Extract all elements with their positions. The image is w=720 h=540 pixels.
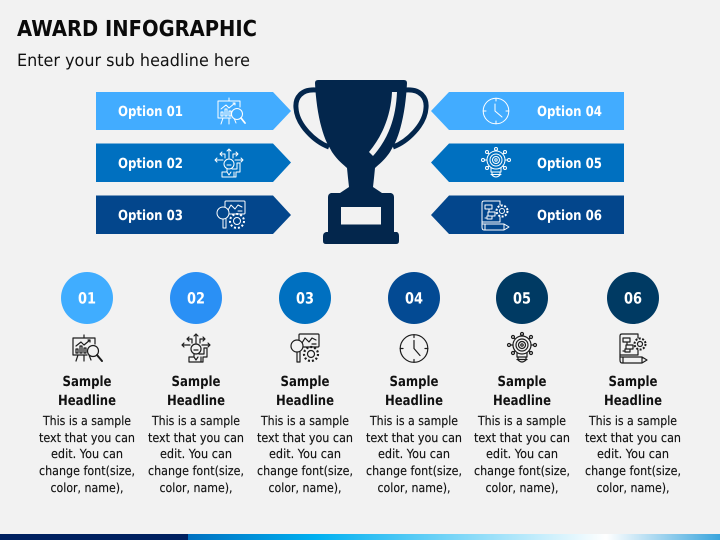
title: AWARD INFOGRAPHIC — [17, 17, 257, 42]
number badge 05: 05 — [513, 290, 531, 308]
panel: option 02: Option 02 — [118, 156, 183, 172]
number badge 04: 04 — [405, 290, 423, 308]
text: sample headline 04: Headline — [385, 393, 443, 409]
text: sample headline 06: color, name), — [596, 480, 670, 495]
panel: option 06 — [431, 196, 624, 234]
panel: option 06: Option 06 — [537, 208, 602, 224]
text: sample headline 01: text that you can — [39, 430, 135, 445]
number badge 06: 06 — [624, 290, 642, 308]
text: sample headline 02: color, name), — [160, 480, 232, 495]
number badge 02: 02 — [187, 290, 205, 308]
text: sample headline 03: color, name), — [268, 480, 342, 495]
text: sample headline 06: edit. You can — [597, 446, 669, 461]
subtitle: Enter your sub headline here — [17, 51, 250, 71]
text: sample headline 01 — [39, 374, 135, 495]
column 03 — [257, 272, 353, 495]
trophy highlight — [369, 92, 397, 156]
text: sample headline 01: color, name), — [50, 480, 124, 495]
text: sample headline 03: This is a sample — [260, 413, 349, 428]
text: sample headline 05: text that you can — [474, 430, 570, 445]
icon: light bulb target — [482, 148, 510, 177]
text: sample headline 01: Headline — [58, 393, 116, 409]
number badge 01 — [61, 272, 113, 324]
text: sample headline 04 — [366, 374, 462, 495]
panel: option 05 — [431, 144, 624, 182]
panel: option 04: Option 04 — [537, 104, 602, 120]
panel: option 01: Option 01 — [118, 104, 183, 120]
text: sample headline 04: change font(size, — [366, 463, 462, 478]
icon: blueprint gear pencil — [620, 334, 647, 363]
icon: presentation analytics — [218, 98, 245, 124]
panel: option 03 — [96, 196, 291, 234]
text: sample headline 06: Sample — [608, 374, 658, 390]
text: sample headline 05: Headline — [493, 393, 551, 409]
number badge 04 — [388, 272, 440, 324]
text: sample headline 05: change font(size, — [474, 463, 570, 478]
text: sample headline 04: text that you can — [366, 430, 462, 445]
number badge 02 — [170, 272, 222, 324]
text: sample headline 03: text that you can — [257, 430, 353, 445]
column 02 — [148, 272, 244, 495]
column 01 — [39, 272, 135, 495]
text: sample headline 05: color, name), — [486, 480, 558, 495]
text: sample headline 05: This is a sample — [477, 413, 566, 428]
panel: option 04 — [431, 92, 624, 130]
icon: magnifier chart gear — [217, 201, 245, 228]
text: sample headline 05: Sample — [498, 374, 546, 390]
text: sample headline 05 — [474, 374, 570, 495]
panel: option 05: Option 05 — [537, 156, 602, 172]
text: sample headline 02: change font(size, — [148, 463, 244, 478]
number badge 01: 01 — [78, 290, 96, 308]
text: sample headline 03: Sample — [280, 374, 330, 390]
icon: person with arrows — [215, 149, 243, 177]
number badge 05 — [496, 272, 548, 324]
text: sample headline 03 — [257, 374, 353, 495]
trophy plate — [341, 207, 381, 224]
text: sample headline 05: edit. You can — [486, 446, 558, 461]
text: sample headline 03: Headline — [276, 393, 334, 409]
number badge 06 — [607, 272, 659, 324]
icon: person with arrows — [182, 334, 210, 362]
icon: clock — [400, 335, 428, 362]
text: sample headline 04: Sample — [390, 374, 438, 390]
text: sample headline 02: Sample — [172, 374, 220, 390]
text: sample headline 02: This is a sample — [151, 413, 240, 428]
trophy — [296, 80, 426, 244]
text: sample headline 02: edit. You can — [160, 446, 232, 461]
panel: option 02 — [96, 144, 291, 182]
panel: option 03: Option 03 — [118, 208, 183, 224]
text: sample headline 02: Headline — [167, 393, 225, 409]
text: sample headline 01: change font(size, — [39, 463, 135, 478]
column 04 — [366, 272, 462, 495]
text: sample headline 02: text that you can — [148, 430, 244, 445]
text: sample headline 01: Sample — [62, 374, 112, 390]
text: sample headline 04: This is a sample — [369, 413, 458, 428]
column 06 — [585, 272, 681, 495]
number badge 03: 03 — [296, 290, 314, 308]
text: sample headline 06: This is a sample — [588, 413, 677, 428]
column 05 — [474, 272, 570, 495]
text: sample headline 06: Headline — [604, 393, 662, 409]
text: sample headline 06: text that you can — [585, 430, 681, 445]
number badge 03 — [279, 272, 331, 324]
icon: light bulb target — [508, 332, 536, 362]
text: sample headline 06 — [585, 374, 681, 495]
text: sample headline 06: change font(size, — [585, 463, 681, 478]
text: sample headline 03: edit. You can — [269, 446, 341, 461]
footer bar — [0, 534, 720, 540]
text: sample headline 01: edit. You can — [51, 446, 123, 461]
panel: option 01 — [96, 92, 291, 130]
icon: magnifier chart gear — [291, 334, 319, 362]
text: sample headline 03: change font(size, — [257, 463, 353, 478]
text: sample headline 02 — [148, 374, 244, 495]
text: sample headline 04: edit. You can — [378, 446, 450, 461]
icon: clock — [483, 98, 509, 124]
text: sample headline 04: color, name), — [378, 480, 450, 495]
icon: presentation analytics — [73, 335, 102, 361]
icon: blueprint gear pencil — [482, 201, 509, 230]
text: sample headline 01: This is a sample — [42, 413, 131, 428]
